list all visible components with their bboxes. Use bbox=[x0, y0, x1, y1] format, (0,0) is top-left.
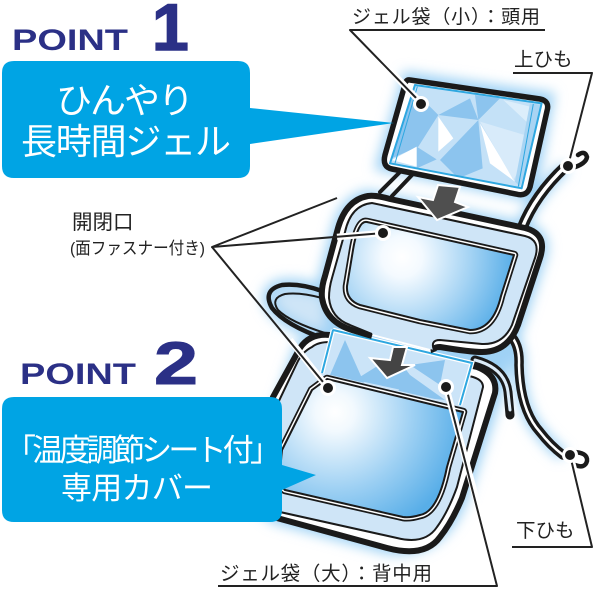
callout 1: ひんやり bbox=[56, 80, 194, 121]
lower gel pack (pale, in pocket) bbox=[322, 330, 472, 405]
callout 1: 長時間ジェル bbox=[21, 121, 231, 162]
label: lower string: 下ひも bbox=[516, 520, 575, 542]
lower window opening bbox=[281, 379, 463, 517]
label: large gel: ジェル袋（大）：背中用 bbox=[220, 563, 432, 585]
heading: POINT 2 bbox=[20, 330, 198, 397]
small gel pack bbox=[384, 80, 548, 195]
arrow: insert large gel bbox=[370, 347, 415, 378]
callout 2: 「温度調節シート付」 bbox=[5, 433, 281, 468]
heading: POINT 1 bbox=[12, 0, 189, 64]
heading: POINT 2: 2 bbox=[154, 330, 198, 397]
label: upper string: 上ひも bbox=[514, 49, 573, 71]
arrow: insert small gel bbox=[418, 185, 468, 220]
glow behind product bbox=[256, 78, 565, 549]
heading: POINT 1: POINT bbox=[12, 24, 128, 57]
callout 2: 専用カバー bbox=[61, 471, 213, 506]
callout 1 bbox=[2, 61, 394, 178]
product illustration: cooling cover bbox=[256, 78, 587, 551]
callout 2 bbox=[2, 397, 316, 522]
upper cover frame bbox=[322, 196, 542, 352]
label: opening: 開閉口 bbox=[72, 211, 134, 234]
label: opening bbox=[70, 211, 205, 258]
lower cover frame bbox=[256, 330, 495, 551]
upper strings bbox=[269, 153, 587, 339]
label: opening: (面ファスナー付き) bbox=[70, 239, 205, 258]
leader lines bbox=[212, 30, 592, 586]
heading: POINT 2: POINT bbox=[20, 358, 136, 391]
upper window opening bbox=[347, 222, 514, 330]
label: small gel: ジェル袋（小）：頭用 bbox=[352, 6, 540, 28]
lower strings bbox=[475, 335, 587, 466]
